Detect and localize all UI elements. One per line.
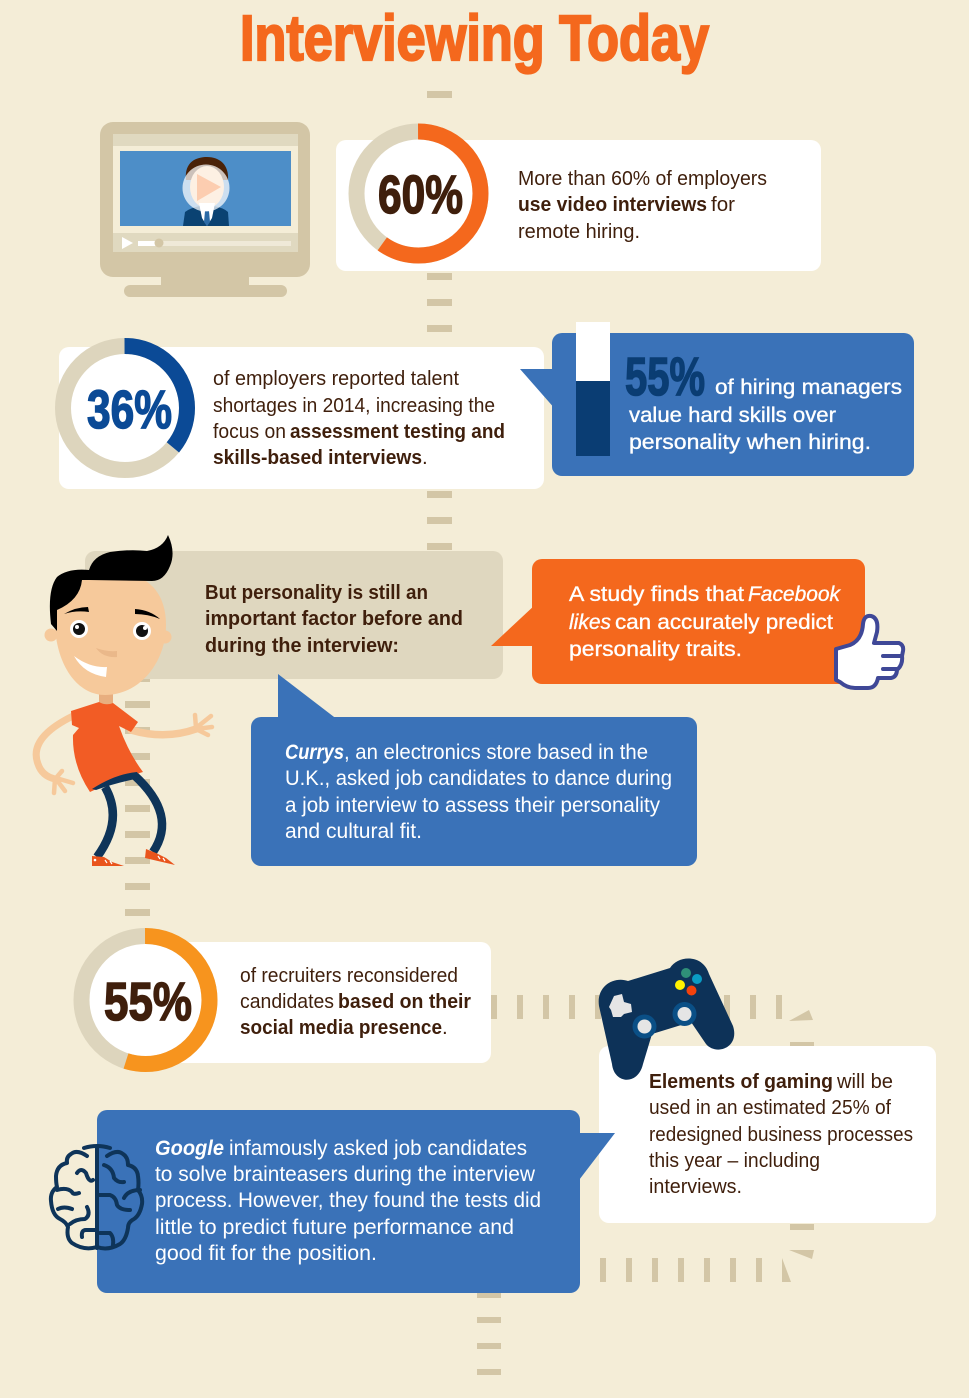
eyebrows — [64, 607, 160, 619]
text: Currys: a job interview to assess their personality — [285, 794, 660, 817]
panel: social media — [82, 936, 491, 1064]
text: Google: good fit for the position. — [155, 1242, 377, 1265]
eyes — [70, 620, 151, 640]
text: video interviews stat: More than 60% of employers — [518, 167, 767, 190]
panel: talent shortages — [59, 346, 544, 489]
text: Google: infamously asked job candidates — [229, 1137, 527, 1160]
text: talent shortages stat — [213, 367, 505, 469]
shoes — [92, 849, 175, 866]
legs — [97, 775, 162, 857]
text: talent shortages stat: shortages in 2014, increasing the — [213, 394, 495, 417]
text: Facebook likes: Facebook — [748, 583, 841, 606]
text: gaming: this year – including — [649, 1149, 820, 1172]
text: video interviews stat — [518, 167, 767, 243]
text: Google: little to predict future performance and — [155, 1216, 514, 1239]
text: Google: to solve brainteasers during the interview — [155, 1163, 536, 1186]
donut chart: 60% — [356, 132, 480, 256]
text: Facebook likes: A study finds that — [569, 583, 744, 606]
text: video interviews stat: for — [711, 193, 735, 216]
stat: 55%: 55% — [625, 347, 705, 407]
callout: Facebook likes — [491, 559, 865, 684]
text: Google — [155, 1137, 541, 1265]
text: personality: during the interview: — [205, 634, 399, 657]
text: Facebook likes: can accurately predict — [615, 611, 833, 634]
text: hard skills: personality when hiring. — [629, 431, 871, 454]
text: gaming: Elements of gaming — [649, 1070, 833, 1093]
donut chart: 55%: 55% — [104, 972, 192, 1032]
text: Facebook likes — [569, 583, 841, 661]
text: gaming: used in an estimated 25% of — [649, 1096, 891, 1119]
text: hard skills: of hiring managers — [715, 376, 902, 399]
text: Facebook likes: personality traits. — [569, 638, 742, 661]
panel: personality — [85, 551, 503, 679]
donut chart: 55% — [82, 936, 210, 1064]
text: video interviews stat: remote hiring. — [518, 220, 640, 243]
text: personality — [205, 581, 463, 657]
text: Currys: Currys — [285, 741, 344, 764]
text: personality: But personality is still an — [205, 581, 428, 604]
head — [44, 535, 173, 695]
panel: video interviews — [336, 132, 821, 271]
hair — [50, 535, 173, 631]
icon: brain — [51, 1146, 142, 1248]
text: Currys: U.K., asked job candidates to dance during — [285, 767, 672, 790]
icon: video monitor — [100, 122, 310, 297]
text: gaming: redesigned business processes — [649, 1123, 913, 1146]
text: talent shortages stat: . — [422, 446, 428, 469]
text: social media stat: social media presence — [240, 1016, 442, 1039]
text: talent shortages stat: assessment testing and — [290, 420, 505, 443]
text: personality: important factor before and — [205, 607, 463, 630]
callout: Currys — [251, 674, 697, 866]
text: social media stat: candidates — [240, 990, 334, 1013]
nose — [96, 648, 117, 657]
text: video interviews stat: use video interviews — [518, 193, 707, 216]
icon: thumbs up — [836, 616, 903, 688]
text: Google: Google — [155, 1137, 224, 1160]
text: Facebook likes: likes — [569, 611, 611, 634]
text: hard skills — [629, 376, 902, 454]
callout: Google — [97, 1110, 615, 1293]
text: Currys: , an electronics store based in the — [344, 741, 648, 764]
text: talent shortages stat: of employers reported talent — [213, 367, 459, 390]
text: social media stat — [240, 964, 471, 1039]
bar chart: 55% — [576, 322, 610, 456]
donut chart: 36% — [63, 346, 187, 470]
text: gaming: interviews. — [649, 1175, 742, 1198]
text: social media stat: of recruiters reconsidered — [240, 964, 458, 987]
text: Currys: and cultural fit. — [285, 820, 422, 843]
icon: game controller — [599, 959, 734, 1080]
text: social media stat: . — [442, 1016, 448, 1039]
text: hard skills: value hard skills over — [629, 404, 836, 427]
panel: gaming — [599, 959, 936, 1223]
shirt — [71, 702, 143, 792]
neck — [99, 690, 113, 706]
illustration: dancing man — [36, 535, 212, 866]
mouth — [74, 656, 107, 677]
arms — [36, 715, 212, 793]
callout: hard skills — [520, 322, 914, 476]
donut chart: 60%: 60% — [378, 165, 463, 225]
title: Interviewing Today — [240, 2, 709, 74]
text: Currys — [285, 741, 672, 843]
text: talent shortages stat: focus on — [213, 420, 286, 443]
text: social media stat: based on their — [338, 990, 471, 1013]
text: talent shortages stat: skills-based interviews — [213, 446, 422, 469]
text: Google: process. However, they found the tests did — [155, 1189, 541, 1212]
donut chart: 36%: 36% — [87, 380, 172, 440]
text: gaming — [649, 1070, 913, 1198]
text: gaming: will be — [836, 1070, 893, 1093]
